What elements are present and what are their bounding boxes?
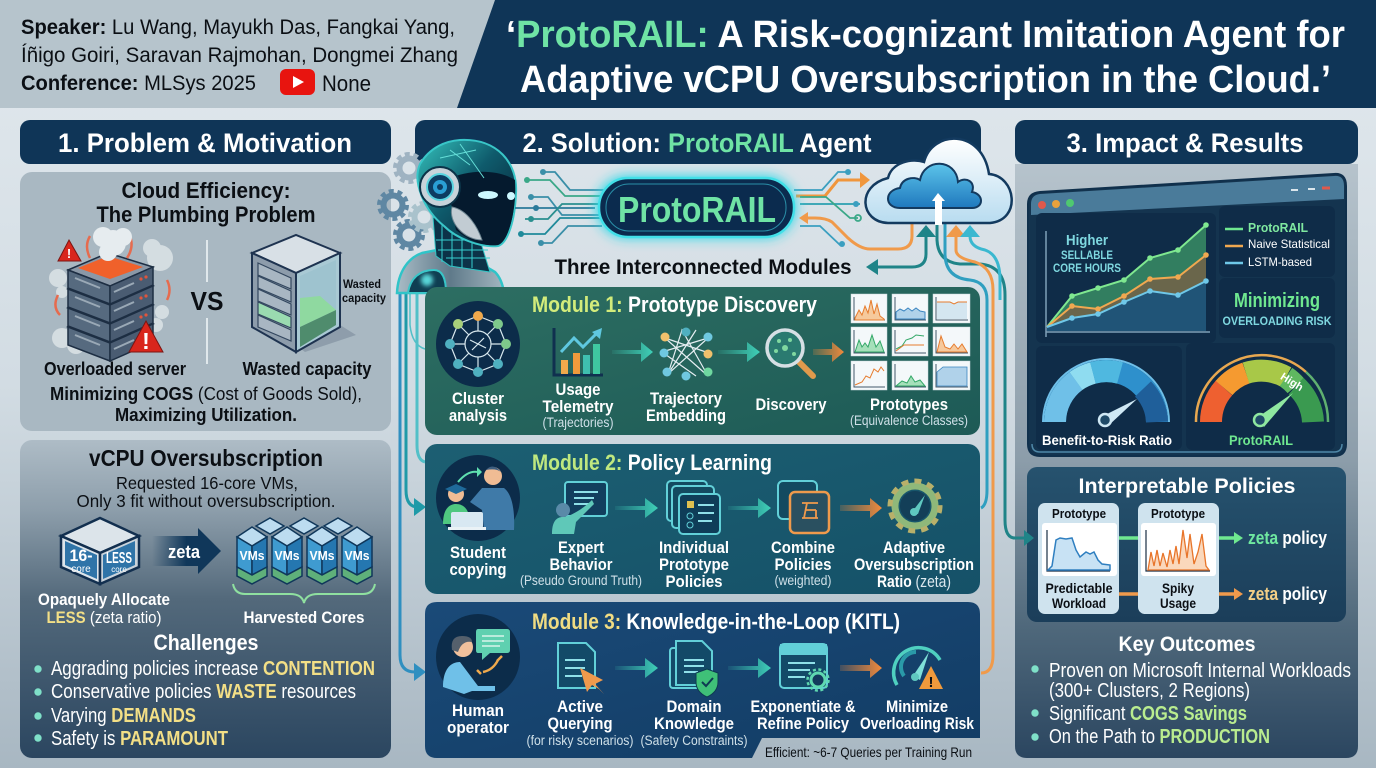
icon: expert behavior xyxy=(552,482,607,534)
card: spiky usage: Prototype xyxy=(1151,506,1205,521)
label: prototypes xyxy=(850,395,968,428)
callout: minimizing overloading risk xyxy=(1219,278,1335,338)
section 3 heading xyxy=(1015,120,1358,164)
arrow: teal xyxy=(615,498,658,518)
arrow: orange xyxy=(840,498,882,518)
label: minimize overloading risk xyxy=(860,697,974,733)
label: active querying: (for risky scenarios) xyxy=(526,733,634,748)
label: exponentiate and refine xyxy=(750,697,856,733)
label: individual prototype policies: Individual xyxy=(659,538,729,557)
pill: ProtoRAIL: ProtoRAIL xyxy=(618,189,776,230)
arrow: orange policy xyxy=(1219,588,1243,600)
label: cluster analysis: Cluster xyxy=(452,389,504,408)
arrow: orange xyxy=(813,342,844,362)
label: adaptive ratio: Oversubscription xyxy=(854,555,974,574)
icon: risk gauge xyxy=(894,648,943,691)
label: active querying: Querying xyxy=(548,714,612,733)
label: individual prototype policies: Prototype xyxy=(659,555,729,574)
label: wasted capacity callout: Wasted xyxy=(343,277,381,291)
title banner xyxy=(457,0,1376,108)
circuit lines: right xyxy=(794,169,870,247)
icon: risk gauge: ! xyxy=(928,674,934,691)
label: adaptive ratio: Ratio (zeta) xyxy=(877,572,951,591)
label: usage telemetry: Usage xyxy=(556,380,600,399)
icon: overloaded server xyxy=(49,227,173,361)
panel: module 3 xyxy=(425,602,980,760)
label: cluster analysis: analysis xyxy=(449,406,507,425)
gauge: ProtoRAIL: ProtoRAIL xyxy=(1229,432,1293,448)
label: individual prototype policies: Policies xyxy=(666,572,722,591)
comparison: VS: VS xyxy=(190,286,224,316)
label: expert behavior: Behavior xyxy=(550,555,613,574)
label: minimize overloading risk: Minimize xyxy=(886,697,948,716)
label: usage telemetry xyxy=(542,380,614,430)
brace: harvested cores xyxy=(233,584,375,603)
chart label: CORE HOURS xyxy=(1053,261,1121,275)
icon: exponentiate and refine xyxy=(780,644,828,690)
text: only 3 fit: Only 3 fit without oversubscription. xyxy=(76,491,336,511)
label: domain knowledge xyxy=(640,697,748,748)
video label: None xyxy=(322,71,371,96)
callout: efficient queries: Efficient: ~6-7 Queries per Training Run xyxy=(765,744,972,760)
label: expert behavior: Expert xyxy=(558,538,604,557)
label: domain knowledge: Domain xyxy=(666,697,722,716)
icon: usage telemetry chart xyxy=(554,328,603,375)
heading: module 1: Module 1: Prototype Discovery xyxy=(532,292,818,317)
gauge: benefit to risk: Benefit-to-Risk Ratio xyxy=(1042,432,1172,448)
label: combine policies: Combine xyxy=(771,538,835,557)
icon: overloaded server: ! xyxy=(67,246,71,261)
label: overloaded server: Overloaded server xyxy=(44,359,186,379)
text: requested VMs: Requested 16-core VMs, xyxy=(116,473,298,493)
arrow: orange xyxy=(840,658,882,678)
label: combine policies xyxy=(771,538,835,588)
section 2 heading xyxy=(415,120,981,164)
label: wasted capacity callout: capacity xyxy=(342,291,386,305)
arrow: teal xyxy=(718,342,760,362)
label: adaptive ratio xyxy=(854,538,974,591)
label: cluster analysis xyxy=(449,389,507,425)
icon: active querying xyxy=(558,643,604,694)
arrow: teal xyxy=(728,498,771,518)
label: student copying xyxy=(450,543,506,579)
chart label: SELLABLE xyxy=(1061,248,1113,262)
icon: cluster analysis xyxy=(436,301,520,387)
label: combine policies: (weighted) xyxy=(774,573,832,588)
pill: ProtoRAIL xyxy=(596,176,796,238)
label: exponentiate and refine: Refine Policy xyxy=(757,714,849,733)
heading: module 2: Module 2: Policy Learning xyxy=(532,450,772,475)
panel: interpretable policies xyxy=(1027,467,1346,622)
arrow lines: cloud connectors xyxy=(799,206,1015,673)
dashboard xyxy=(1028,174,1346,456)
arrow: into interpretable policies xyxy=(1013,530,1034,546)
label: active querying xyxy=(526,697,634,748)
header: speaker info xyxy=(0,0,500,108)
arrow: teal xyxy=(728,658,771,678)
section 1 heading xyxy=(20,120,391,164)
label: wasted capacity: Wasted capacity xyxy=(242,359,372,379)
icon: discovery magnifier xyxy=(767,330,813,376)
icon: student copying xyxy=(436,455,520,541)
label: adaptive ratio: Adaptive xyxy=(883,538,945,557)
text: minimizing COGS: Minimizing COGS (Cost of Goods Sold), xyxy=(50,384,362,404)
heading: plumbing problem: The Plumbing Problem xyxy=(96,202,316,227)
card: predictable workload: Predictable xyxy=(1046,580,1113,596)
outcomes list: Significant COGS Savings xyxy=(1049,703,1247,725)
icon: 16-core cube: core xyxy=(71,564,91,575)
panel: cloud efficiency xyxy=(20,172,391,431)
label: student copying: Student xyxy=(450,543,506,562)
label: student copying: copying xyxy=(450,560,506,579)
label: harvested cores: Harvested Cores xyxy=(244,608,364,627)
icon: combine policies xyxy=(778,481,829,533)
label: exponentiate and refine: Exponentiate & xyxy=(750,697,856,716)
card: spiky usage: Spiky xyxy=(1162,580,1194,596)
icon: individual policies xyxy=(667,481,720,534)
legend: ProtoRAIL xyxy=(1248,220,1308,235)
card: spiky usage xyxy=(1138,503,1219,614)
heading: interpretable policies: Interpretable Policies xyxy=(1078,475,1296,498)
legend: LSTM-based xyxy=(1248,255,1312,269)
heading: three interconnected modules: Three Interconnected Modules xyxy=(554,256,852,279)
icon: gears xyxy=(379,154,438,249)
heading: challenges: Challenges xyxy=(154,630,258,655)
outcomes list: On the Path to PRODUCTION xyxy=(1049,726,1270,748)
icon: wasted capacity server xyxy=(252,235,356,352)
connector lines: left side xyxy=(400,285,426,681)
callout: minimizing overloading risk: Minimizing xyxy=(1234,290,1320,312)
icon: overloaded server: ! xyxy=(142,328,150,354)
label: prototypes: (Equivalence Classes) xyxy=(850,413,968,428)
arrow: teal xyxy=(615,658,658,678)
label: expert behavior: (Pseudo Ground Truth) xyxy=(520,573,642,588)
section 1 heading: 1. Problem & Motivation xyxy=(58,128,352,158)
icon: 16-core cube: LESS xyxy=(106,550,132,567)
heading: key outcomes: Key Outcomes xyxy=(1118,633,1256,656)
label: usage telemetry: (Trajectories) xyxy=(542,415,614,430)
icon: harvested VM cubes xyxy=(237,518,372,584)
speaker line 2: Íñigo Goiri, Saravan Rajmohan, Dongmei Zhang xyxy=(21,42,458,67)
label: domain knowledge: (Safety Constraints) xyxy=(640,733,748,748)
label: combine policies: Policies xyxy=(774,555,832,574)
gauge: ProtoRAIL: High xyxy=(1278,371,1305,394)
card: predictable workload: Workload xyxy=(1052,595,1106,611)
title line 2: Adaptive vCPU Oversubscription in the Cloud.’ xyxy=(520,59,1331,101)
icon: 16-core cube xyxy=(61,518,139,584)
section 2 heading: 2. Solution: ProtoRAIL Agent xyxy=(522,128,872,158)
line chart xyxy=(1036,213,1216,343)
heading: vCPU oversubscription: vCPU Oversubscription xyxy=(89,445,323,471)
arrow: zeta xyxy=(152,528,221,574)
section 3 heading: 3. Impact & Results xyxy=(1066,128,1304,158)
title line 1: ‘ProtoRAIL: A Risk-cognizant Imitation Agent for xyxy=(506,14,1345,56)
label: active querying: Active xyxy=(557,697,603,716)
chart label: Higher xyxy=(1066,232,1108,249)
conference line: Conference: MLSys 2025 xyxy=(21,71,256,95)
connectors: card links xyxy=(1119,538,1138,594)
label: trajectory embedding xyxy=(646,389,726,425)
icon: robot xyxy=(397,140,516,293)
heading: cloud efficiency: Cloud Efficiency: xyxy=(122,178,290,203)
label: human operator: operator xyxy=(447,718,509,737)
challenge list xyxy=(34,658,375,750)
panel: vCPU oversubscription xyxy=(20,440,391,758)
label: expert behavior xyxy=(520,538,642,588)
card: predictable workload xyxy=(1038,503,1119,614)
label: discovery: Discovery xyxy=(756,395,827,414)
challenge list: Safety is PARAMOUNT xyxy=(51,728,228,750)
arrow: green policy xyxy=(1219,532,1243,544)
icon: adaptive ratio gear xyxy=(890,481,940,531)
comparison: VS xyxy=(190,240,224,364)
label: trajectory embedding: Embedding xyxy=(646,406,726,425)
icon: 16-core cube: core xyxy=(111,565,127,574)
icon: cloud xyxy=(865,139,1012,240)
circuit lines: left xyxy=(515,169,605,246)
heading: module 3: Module 3: Knowledge-in-the-Loop (KITL) xyxy=(532,609,900,634)
card: spiky usage: Usage xyxy=(1160,595,1196,611)
speaker line 1: Speaker: Lu Wang, Mayukh Das, Fangkai Yang, xyxy=(21,15,455,39)
legend: Naive Statistical xyxy=(1248,237,1330,251)
label: wasted capacity callout xyxy=(342,277,386,305)
legend xyxy=(1219,206,1335,277)
label: minimize overloading risk: Overloading Risk xyxy=(860,714,974,733)
label: opaquely allocate: Opaquely Allocate xyxy=(38,590,170,609)
label: zeta policy 2: zeta policy xyxy=(1248,584,1327,604)
challenge list: Aggrading policies increase CONTENTION xyxy=(51,658,375,680)
icon: 16-core cube: 16- xyxy=(70,546,92,565)
outcomes list: (300+ Clusters, 2 Regions) xyxy=(1049,680,1250,702)
chart label xyxy=(1053,232,1121,275)
label: less zeta ratio: LESS (zeta ratio) xyxy=(46,608,162,627)
panel: module 2 xyxy=(425,444,980,594)
outcomes list xyxy=(1031,660,1351,748)
panel: impact and results xyxy=(1013,164,1358,758)
icon: domain knowledge xyxy=(670,641,718,697)
label: domain knowledge: Knowledge xyxy=(654,714,734,733)
arrow: zeta: zeta xyxy=(168,542,201,562)
label: human operator: Human xyxy=(452,701,504,720)
label: human operator xyxy=(447,701,509,737)
label: prototypes: Prototypes xyxy=(870,395,948,414)
challenge list: Conservative policies WASTE resources xyxy=(51,681,356,703)
icon: video play xyxy=(280,69,315,95)
gauge: ProtoRAIL xyxy=(1186,343,1335,450)
panel: module 1 xyxy=(425,287,980,435)
label: zeta policy 1: zeta policy xyxy=(1248,528,1327,548)
prototype grid xyxy=(851,294,970,390)
card: predictable workload: Prototype xyxy=(1052,506,1106,521)
callout: minimizing overloading risk: OVERLOADING RISK xyxy=(1222,314,1332,328)
icon: trajectory embedding xyxy=(660,328,712,380)
gauge: benefit to risk xyxy=(1036,346,1182,450)
label: individual prototype policies xyxy=(659,538,729,591)
text: maximizing utilization: Maximizing Utilization. xyxy=(115,405,297,425)
label: trajectory embedding: Trajectory xyxy=(650,389,722,408)
icon: human operator xyxy=(436,614,520,700)
arrow: teal xyxy=(612,342,653,362)
challenge list: Varying DEMANDS xyxy=(51,705,196,727)
label: usage telemetry: Telemetry xyxy=(542,397,614,416)
